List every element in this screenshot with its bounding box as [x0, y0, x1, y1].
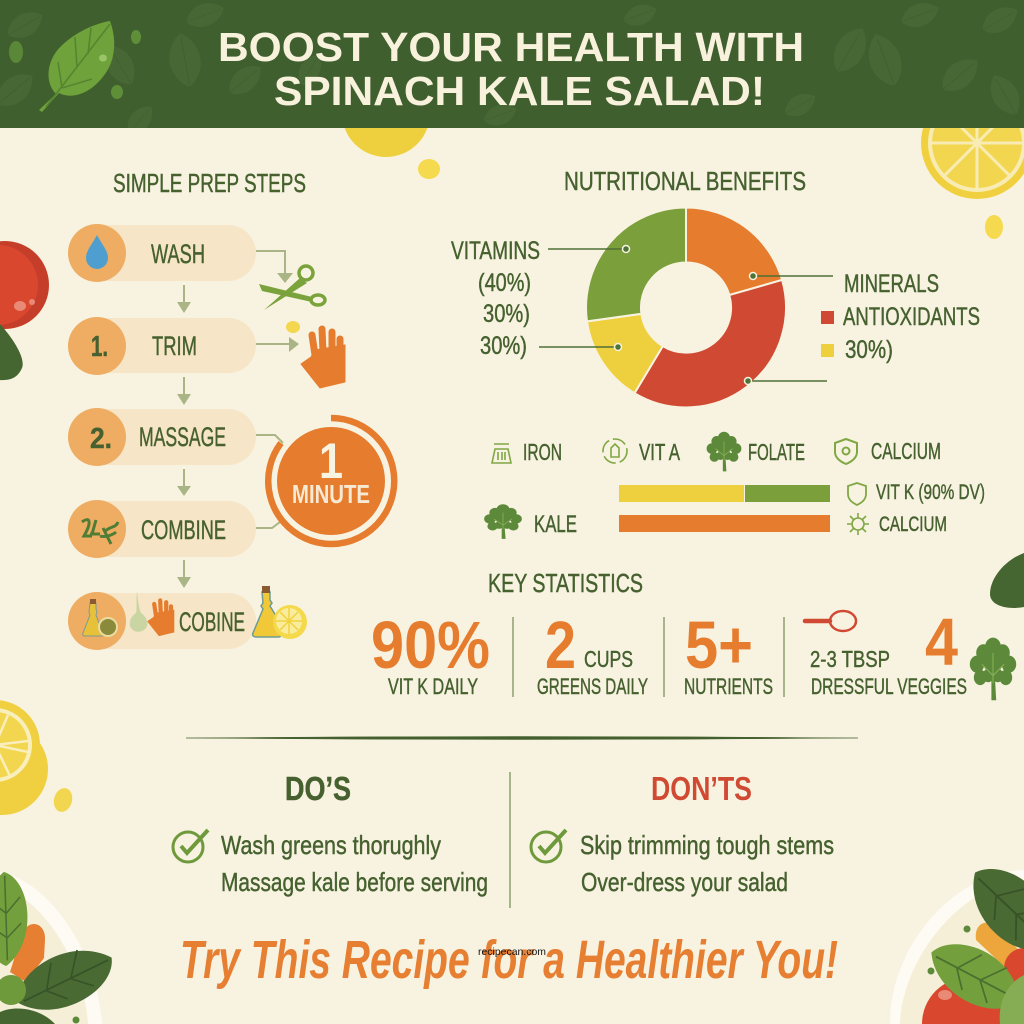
icon: folate leaf: [707, 432, 741, 471]
panel: do's: Massage kale before serving: [221, 867, 488, 897]
kale label: [484, 504, 577, 539]
decoration: leaf right edge: [990, 553, 1024, 608]
chart legend right: [821, 270, 980, 364]
icon: small orange hand: [148, 600, 174, 636]
icon: shield outline: [848, 483, 866, 505]
step: wash: WASH: [151, 239, 205, 269]
timer badge: 1: [319, 433, 343, 489]
kale label: KALE: [534, 511, 577, 538]
icon: calcium burst: [847, 513, 869, 535]
header banner: [0, 0, 1024, 142]
stat: 2 cups: CUPS: [584, 646, 633, 672]
decoration: lemon left: [0, 700, 75, 815]
stat: 2 cups: 2: [545, 608, 576, 683]
stat: dressing and veggies: 4: [925, 605, 958, 680]
nutrient icon row: VIT A: [639, 439, 680, 465]
decoration: salad bowl bottom right: [890, 851, 1024, 1024]
stat: dressing and veggies: 2-3 TBSP: [810, 646, 890, 672]
nutrient icon row: IRON: [523, 439, 562, 465]
arrow: wash to scissors: [256, 251, 293, 283]
chart legend right: ANTIOXIDANTS: [843, 303, 980, 331]
title: [218, 24, 804, 114]
icon: herb scribble: [82, 520, 118, 544]
icon: cilantro: [970, 638, 1016, 700]
icon: garlic bulb: [130, 591, 147, 632]
center divider: [509, 772, 511, 908]
icon: iron: [492, 444, 511, 463]
bar legend: VIT K (90% DV): [876, 481, 985, 504]
panel: don'ts: DON’TS: [651, 770, 752, 807]
icon: vitamin a: [603, 439, 627, 463]
step: massage: MASSAGE: [139, 422, 226, 452]
step: massage: [68, 408, 256, 466]
decoration: yellow seed right: [985, 215, 1003, 239]
stat: 2 cups: [537, 608, 648, 699]
icon: orange hand: [301, 329, 345, 388]
step: final combine: COBINE: [179, 607, 245, 637]
panel: do's: DO’S: [285, 770, 351, 807]
panel: don'ts: [531, 770, 834, 897]
step: final combine: [68, 591, 256, 650]
heading: nutritional benefits: NUTRITIONAL BENEFITS: [564, 166, 806, 196]
title: SPINACH KALE SALAD!: [274, 68, 765, 114]
arrows: vertical flow: [177, 285, 191, 588]
chart labels left: VITAMINS: [451, 237, 540, 265]
panel: don'ts: Over-dress your salad: [581, 867, 788, 897]
icon: yellow dot: [286, 321, 300, 333]
watermark: recipecan.com: [478, 946, 546, 958]
panel: do's: Wash greens thorughly: [221, 830, 441, 860]
icon: kale leaf: [484, 504, 522, 539]
panel: don'ts: Skip trimming tough stems: [580, 830, 834, 860]
heading: simple prep steps: SIMPLE PREP STEPS: [113, 168, 306, 198]
stat: 90%: VIT K DAILY: [388, 674, 478, 699]
bar legend: CALCIUM: [879, 513, 947, 536]
arrow: trim to hand: [256, 337, 299, 352]
icon: check: [173, 830, 208, 862]
decoration: salad bowl bottom left: [0, 871, 123, 1024]
decoration: lemon slice top right: [921, 87, 1024, 199]
panel: do's: [173, 770, 488, 897]
nutrient icon row: CALCIUM: [871, 438, 941, 464]
stat: 2 cups: GREENS DAILY: [537, 674, 648, 699]
step: wash: [68, 224, 256, 282]
icon: big spinach leaf: [39, 21, 114, 112]
bar legend: [847, 481, 985, 536]
decoration: yellow lemon under header: [342, 69, 440, 179]
icon: oil bottle and lemon: [253, 586, 307, 639]
icon: shield: [835, 439, 857, 464]
connectors: to timer: [256, 435, 283, 528]
step: combine: [68, 500, 256, 558]
step: trim: TRIM: [152, 331, 197, 361]
heading: key statistics: KEY STATISTICS: [488, 568, 643, 598]
icon: small oil bottle and lemon: [83, 599, 117, 636]
donut chart: [586, 208, 786, 407]
icon: check: [531, 830, 566, 862]
step: combine: COMBINE: [141, 515, 226, 545]
chart legend right: 30%): [845, 336, 893, 364]
chart legend right: MINERALS: [844, 270, 939, 298]
divider: [186, 736, 858, 740]
step: trim: [68, 317, 256, 375]
chart labels left: [451, 237, 540, 360]
chart labels left: 30%): [483, 300, 530, 328]
decoration: tomato and leaf left: [0, 241, 49, 380]
stat: dressing and veggies: [805, 605, 1016, 700]
bar chart: [619, 485, 830, 532]
step: trim: 1.: [91, 331, 108, 363]
step: massage: 2.: [90, 423, 112, 455]
nutrient icon row: [492, 432, 941, 471]
chart labels left: 30%): [480, 332, 527, 360]
timer badge: [268, 418, 394, 544]
nutrient icon row: FOLATE: [748, 439, 805, 465]
stat: 5+: 5+: [685, 608, 753, 683]
timer badge: MINUTE: [292, 479, 370, 509]
stat: 5+: NUTRIENTS: [684, 674, 773, 699]
icon: scissors: [259, 266, 325, 310]
stat: 90%: 90%: [371, 608, 490, 683]
icon: red spoon: [805, 611, 856, 631]
title: BOOST YOUR HEALTH WITH: [218, 24, 804, 70]
icon: water drop: [86, 235, 108, 269]
stat separators: [513, 617, 784, 697]
chart leader lines: [539, 246, 833, 384]
chart labels left: (40%): [478, 269, 531, 297]
